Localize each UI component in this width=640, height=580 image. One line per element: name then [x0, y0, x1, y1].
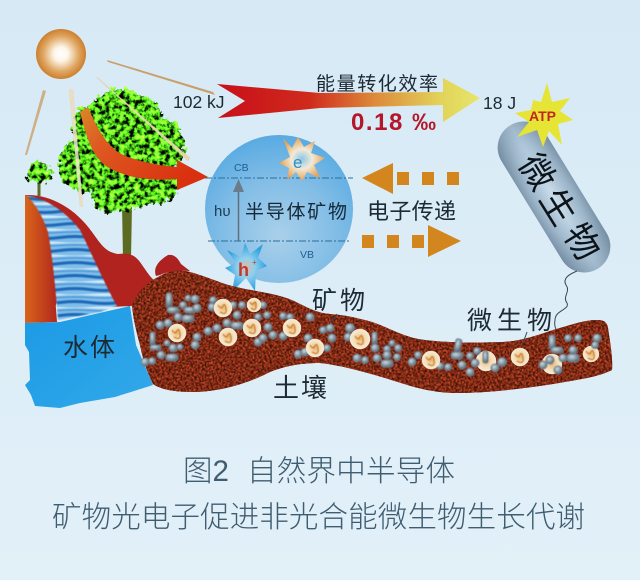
icon: hole burst: h	[238, 260, 249, 280]
particle squiggles	[172, 302, 594, 365]
arrow: electron transfer rightward	[362, 225, 461, 257]
icon: electron burst	[279, 137, 325, 181]
icon: hole burst	[225, 243, 267, 292]
label: microbe, rotated: 生	[532, 182, 583, 232]
title: 图2	[183, 455, 229, 488]
label: VB: VB	[300, 249, 314, 261]
arrow: electron transfer leftward	[362, 163, 459, 194]
label: microbe, rotated: 物	[556, 217, 607, 267]
infographic canvas	[24, 29, 612, 530]
water body	[25, 306, 153, 408]
label: soil: 土壤	[273, 373, 327, 403]
icon: large tree	[58, 77, 190, 258]
label: semiconductor mineral: 半导体矿物	[245, 201, 347, 223]
icon: sun with rays	[25, 29, 215, 207]
panel: semiconductor mineral sphere	[205, 135, 353, 283]
label: 18 J: 18 J	[483, 93, 516, 113]
river stream	[27, 196, 117, 320]
value: 0.18 per mille: 0.18 ‰	[351, 109, 436, 136]
soil band	[132, 270, 612, 393]
icon: microbe capsule	[488, 83, 620, 282]
river banks	[25, 195, 190, 323]
soil minerals	[141, 293, 452, 370]
label: CB: CB	[234, 162, 249, 174]
title: 矿物光电子促进非光合能微生物生长代谢	[52, 501, 585, 534]
icon: small tree	[27, 161, 52, 196]
label: h upsilon: hυ	[214, 203, 231, 220]
label: microbe, rotated	[511, 147, 607, 267]
title	[52, 455, 585, 534]
minerals over particles	[451, 334, 601, 376]
icon: electron burst: e	[293, 153, 302, 172]
icon: ATP star	[515, 83, 573, 147]
microbe flagellum	[555, 271, 577, 331]
arrow: band gap excitation	[233, 179, 244, 241]
label: energy conversion efficiency: 能量转化效率	[316, 73, 438, 95]
label: electron transfer: 电子传递	[367, 199, 456, 224]
label: minerals: 矿物	[312, 287, 365, 315]
label: microbe, rotated: 微	[511, 147, 562, 197]
label: 102 kJ: 102 kJ	[173, 92, 225, 112]
icon: hole burst: +	[252, 258, 257, 267]
title: 自然界中半导体	[247, 455, 455, 488]
label: microbe in soil: 微生物	[467, 307, 552, 335]
red arrow from sun into mineral	[80, 107, 208, 190]
soil particles	[168, 298, 599, 374]
label: water body: 水体	[63, 334, 115, 362]
energy conversion arrow	[217, 78, 480, 122]
icon: ATP star: ATP	[529, 108, 556, 124]
